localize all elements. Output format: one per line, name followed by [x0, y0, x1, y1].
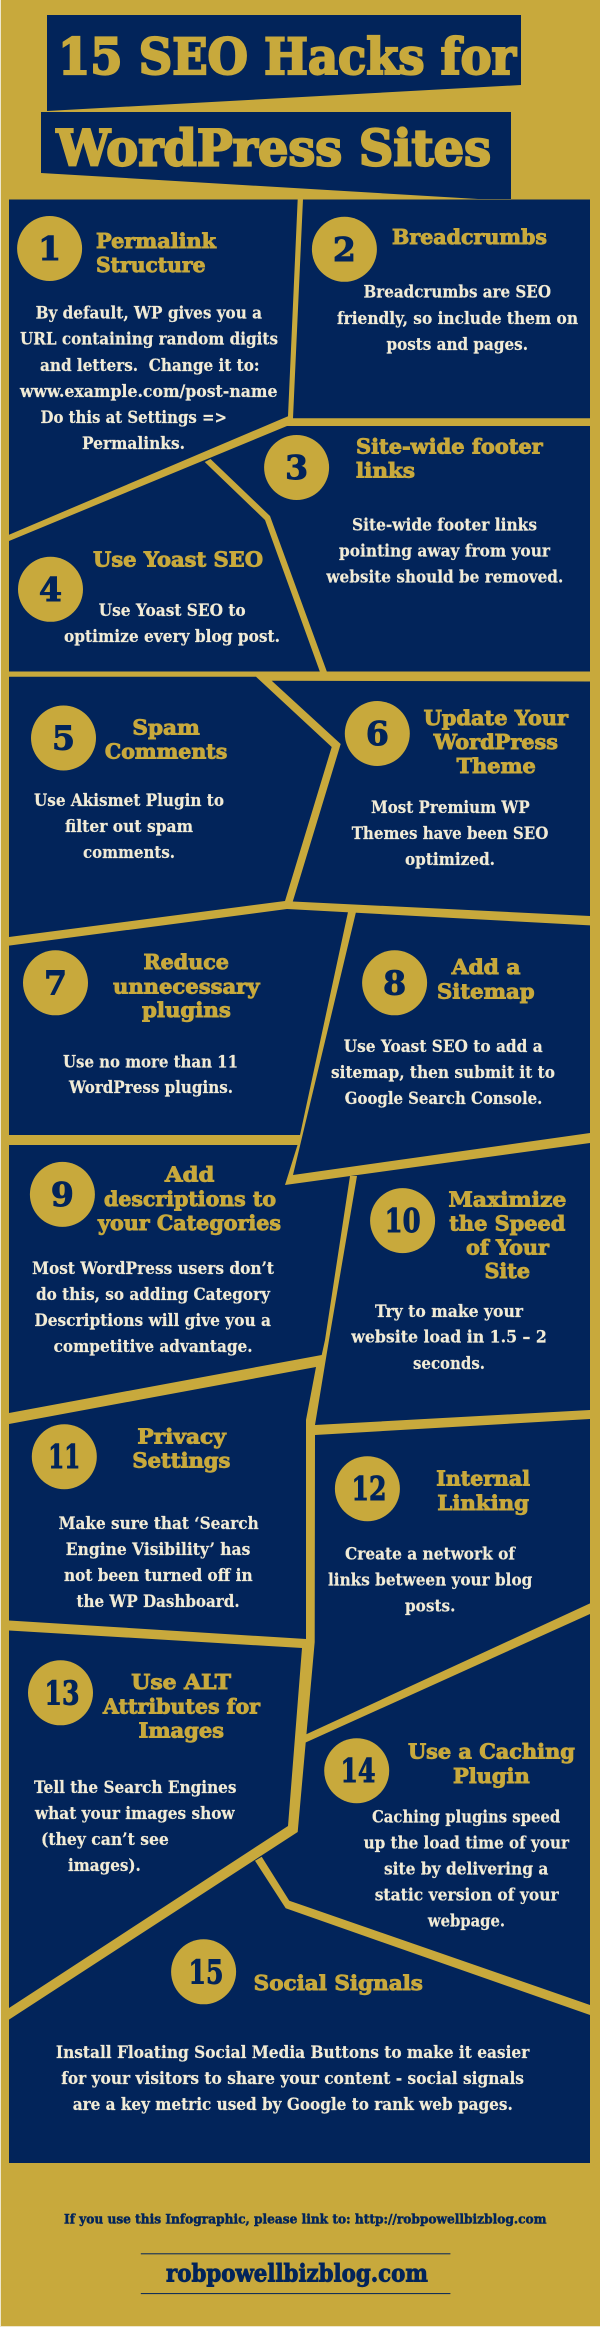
panel: 8 Add a Sitemap	[331, 950, 555, 1109]
icon: number 15: 15	[188, 1952, 224, 1991]
heading: of Your	[466, 1236, 550, 1260]
icon: number 10: 10	[385, 1201, 421, 1240]
body text: Most WordPress users don’t	[32, 1259, 274, 1279]
icon: number 14	[324, 1738, 389, 1803]
icon: number 7	[23, 950, 88, 1015]
icon: number 13: 13	[44, 1673, 80, 1712]
body text: up the load time of your	[364, 1834, 570, 1854]
heading	[96, 229, 217, 277]
body text: not been turned off in	[64, 1566, 253, 1586]
body text	[34, 1778, 236, 1876]
heading: unnecessary	[113, 974, 261, 998]
body text: posts.	[405, 1596, 455, 1616]
body text: are a key metric used by Google to rank web pages.	[73, 2095, 513, 2115]
heading: Breadcrumbs	[392, 225, 547, 249]
panel: 2 Breadcrumbs	[312, 217, 578, 355]
body text	[32, 1259, 274, 1357]
heading: WordPress	[433, 730, 558, 754]
heading: Use Yoast SEO	[93, 547, 263, 571]
heading	[102, 1670, 261, 1742]
heading: Comments	[105, 739, 227, 763]
body text: Use no more than 11	[63, 1052, 238, 1072]
panel: 11 Privacy Settings	[32, 1424, 259, 1612]
heading: Sitemap	[437, 979, 535, 1003]
body text: sitemap, then submit it to	[331, 1063, 555, 1083]
title banner line 1: 15 SEO Hacks for	[58, 27, 517, 86]
icon: number 2: 2	[333, 230, 356, 269]
body text: Install Floating Social Media Buttons to make it easier	[56, 2043, 530, 2063]
heading: the Speed	[449, 1211, 565, 1235]
icon: number 12	[335, 1456, 400, 1521]
title banner line 2: WordPress Sites	[56, 118, 491, 178]
body text: static version of your	[375, 1886, 560, 1906]
body text: optimize every blog post.	[64, 627, 280, 647]
body text: Use Yoast SEO to	[99, 601, 246, 621]
heading: Settings	[132, 1449, 230, 1473]
body text: Site-wide footer links	[352, 515, 537, 535]
icon: number 5: 5	[52, 718, 75, 758]
heading: Plugin	[453, 1764, 530, 1788]
icon: number 14: 14	[340, 1751, 376, 1790]
body text: comments.	[83, 843, 175, 863]
heading: Internal	[436, 1467, 530, 1491]
body text: Breadcrumbs are SEO	[364, 282, 551, 302]
body text: (they can’t see	[41, 1830, 169, 1850]
panel: 9 Add descriptions to your Categories	[30, 1162, 281, 1357]
body text: site by delivering a	[384, 1860, 548, 1880]
heading: Permalink	[96, 229, 217, 253]
heading: your Categories	[97, 1211, 281, 1235]
body text: Descriptions will give you a	[34, 1311, 271, 1331]
icon: number 15	[171, 1939, 236, 2004]
body text	[352, 798, 549, 870]
body text	[331, 1037, 555, 1109]
heading	[436, 1467, 530, 1515]
body text: Caching plugins speed	[372, 1808, 560, 1828]
panel: 7 Reduce unnecessary plugins	[23, 950, 261, 1098]
panel: 10 Maximize the Speed of Your Site	[350, 1187, 566, 1374]
heading: Structure	[96, 253, 206, 277]
panel: 13 Use ALT Attributes for Images	[28, 1660, 261, 1876]
heading: Spam	[132, 715, 200, 739]
panel: 12 Internal Linking	[328, 1456, 532, 1616]
icon: number 11	[32, 1424, 97, 1489]
heading: descriptions to	[104, 1187, 276, 1211]
icon: number 1: 1	[38, 229, 61, 268]
body text: Themes have been SEO	[352, 824, 549, 844]
body text: Google Search Console.	[345, 1089, 542, 1109]
body text: competitive advantage.	[54, 1337, 253, 1357]
body text: links between your blog	[328, 1570, 532, 1590]
heading: Maximize	[448, 1187, 566, 1211]
heading: Update Your	[424, 706, 569, 730]
body text	[59, 1514, 259, 1612]
heading: Use a Caching	[408, 1740, 575, 1764]
body text: website load in 1.5 – 2	[350, 1328, 547, 1348]
panel: 6 Update Your WordPress Theme	[345, 701, 569, 870]
title banner line 1	[47, 15, 521, 111]
body text: Use Yoast SEO to add a	[344, 1037, 543, 1057]
body text	[350, 1302, 547, 1374]
heading: Theme	[457, 754, 536, 778]
heading: Social Signals	[254, 1971, 423, 1995]
heading	[356, 435, 544, 482]
body text: posts and pages.	[386, 335, 528, 355]
heading	[437, 955, 535, 1003]
icon: number 11: 11	[48, 1437, 80, 1476]
icon: number 10	[370, 1188, 435, 1253]
heading: Images	[138, 1718, 224, 1742]
body text: for your visitors to share your content - social signals	[61, 2069, 524, 2089]
icon: number 13	[28, 1660, 93, 1725]
body text	[34, 791, 224, 863]
body text: Create a network of	[345, 1544, 517, 1564]
footer: attribution note: If you use this Infographic, please link to: http://robpowellbizblog.com	[64, 2213, 547, 2228]
heading: Add a	[451, 955, 520, 979]
body text	[328, 1544, 532, 1616]
body text: Tell the Search Engines	[34, 1778, 236, 1798]
body text: Use Akismet Plugin to	[34, 791, 224, 811]
icon: number 2	[312, 217, 377, 282]
body text	[19, 304, 278, 454]
heading	[132, 1424, 230, 1473]
panel: 4 Use Yoast SEO	[18, 547, 280, 647]
heading	[448, 1187, 566, 1283]
heading: Add	[164, 1163, 214, 1187]
body text	[364, 1808, 570, 1932]
body text: and letters. Change it to:	[40, 356, 260, 376]
panel: 5 Spam Comments	[31, 706, 227, 863]
body text: www.example.com/post-name	[19, 382, 278, 402]
heading: Reduce	[144, 950, 229, 974]
heading	[97, 1163, 281, 1235]
icon: number 12: 12	[352, 1469, 386, 1508]
body text: webpage.	[427, 1912, 505, 1932]
icon: number 4	[18, 557, 83, 622]
body text: filter out spam	[65, 817, 193, 837]
panel: 3 Site-wide footer links	[264, 435, 563, 587]
icon: number 3	[264, 435, 329, 500]
body text: Make sure that ‘Search	[59, 1514, 259, 1534]
body text: do this, so adding Category	[36, 1285, 271, 1305]
body text	[63, 1052, 238, 1098]
body text: By default, WP gives you a	[36, 304, 262, 324]
heading: Privacy	[137, 1424, 227, 1448]
heading: plugins	[142, 998, 231, 1022]
body text	[337, 282, 578, 355]
body text: seconds.	[413, 1354, 485, 1374]
heading: Attributes for	[102, 1694, 261, 1718]
icon: number 6: 6	[366, 714, 389, 753]
heading	[424, 706, 569, 778]
heading: Linking	[437, 1491, 529, 1515]
heading: links	[356, 458, 415, 482]
body text: Try to make your	[375, 1302, 524, 1322]
body text: the WP Dashboard.	[76, 1592, 240, 1612]
icon: number 9	[30, 1162, 95, 1227]
body text	[64, 601, 280, 647]
heading: Use ALT	[131, 1670, 232, 1694]
body text: what your images show	[34, 1804, 235, 1824]
body text: pointing away from your	[339, 541, 551, 561]
panel: 15 Social Signals	[56, 1939, 530, 2115]
heading: Site	[484, 1259, 530, 1283]
body text	[56, 2043, 530, 2115]
title	[41, 15, 521, 199]
panel: 14 Use a Caching Plugin	[324, 1738, 575, 1932]
body text: Engine Visibility’ has	[66, 1540, 250, 1560]
body text: images).	[68, 1856, 141, 1876]
heading: Site-wide footer	[356, 435, 544, 459]
icon: number 1	[17, 216, 82, 281]
title banner line 2	[41, 112, 511, 199]
footer: site name: robpowellbizblog.com	[166, 2259, 428, 2288]
body text: Permalinks.	[82, 434, 185, 454]
body text: website should be removed.	[326, 567, 563, 587]
icon: number 7: 7	[44, 963, 67, 1002]
heading	[408, 1740, 575, 1788]
icon: number 9: 9	[51, 1175, 74, 1214]
icon: number 8	[362, 950, 427, 1015]
panel: 1 Permalink Structure	[17, 216, 278, 454]
heading	[113, 950, 261, 1022]
icon: number 6	[345, 701, 410, 766]
icon: number 3: 3	[285, 448, 308, 487]
body text: Most Premium WP	[371, 798, 530, 818]
body text: WordPress plugins.	[68, 1078, 233, 1098]
icon: number 5	[31, 706, 96, 770]
icon: number 8: 8	[383, 963, 406, 1002]
body text: optimized.	[405, 850, 495, 870]
body text: friendly, so include them on	[337, 309, 578, 329]
icon: number 4: 4	[39, 570, 62, 609]
body text	[326, 515, 563, 587]
heading	[105, 715, 227, 763]
body text: URL containing random digits	[20, 330, 278, 350]
body text: Do this at Settings =>	[40, 408, 227, 428]
